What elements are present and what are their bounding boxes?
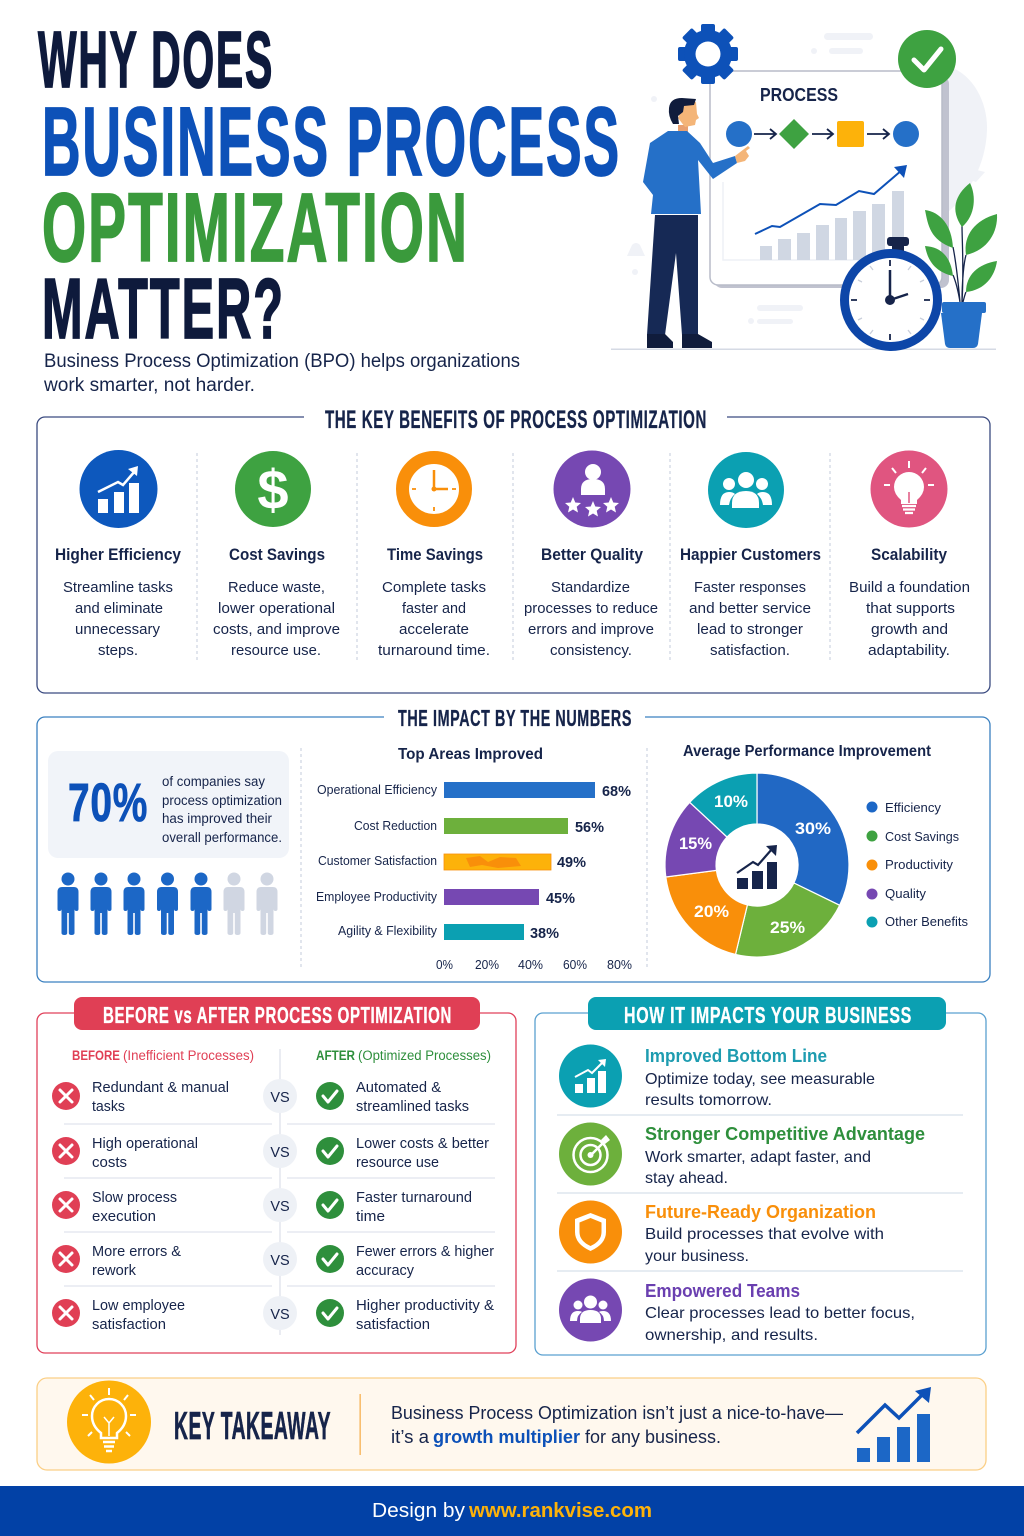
benefit: time savings: [378, 458, 490, 659]
row 3: [52, 1188, 472, 1225]
row 1: Redundant & manual: [92, 1080, 229, 1096]
benefit: time savings: faster and: [402, 600, 466, 617]
bar chart: top areas improved: 20%: [475, 958, 499, 972]
item: stronger competitive advantage: Stronger Competitive Advantage: [645, 1123, 925, 1144]
row 5: Higher productivity &: [356, 1298, 494, 1314]
bar chart: top areas improved: 45%: [546, 890, 575, 907]
bar chart: top areas improved: [316, 746, 632, 972]
benefit: scalability: adaptability.: [868, 642, 950, 659]
row 4: VS: [270, 1253, 290, 1269]
footer: Design by: [372, 1500, 465, 1522]
row 4: [52, 1242, 494, 1279]
legend: Productivity: [885, 857, 953, 872]
subtitle: Business Process Optimization (BPO) helps organizations: [44, 351, 520, 372]
benefit: better quality: Standardize: [551, 579, 630, 596]
item: stronger competitive advantage: stay ahead.: [645, 1170, 728, 1187]
ground line: [611, 348, 996, 350]
banner: before vs after: BEFORE vs AFTER PROCESS OPTIMIZATION: [103, 1002, 452, 1028]
panel: before vs after: [37, 997, 516, 1353]
row 5: [52, 1296, 494, 1333]
title: [38, 15, 621, 357]
donut chart: average performance improvement: 10%: [714, 792, 748, 811]
benefit: cost savings: Cost Savings: [229, 546, 325, 564]
row 1: [52, 1079, 469, 1115]
item: improved bottom line: [559, 1044, 875, 1109]
panel: how it impacts your business: [535, 997, 986, 1355]
legend: [866, 800, 968, 929]
banner: how it impacts: [588, 997, 946, 1030]
legend: Quality: [885, 886, 926, 901]
benefit: scalability: Scalability: [871, 546, 948, 564]
takeaway text: for any business.: [585, 1427, 721, 1447]
benefit: higher efficiency: steps.: [98, 642, 138, 659]
row 5: satisfaction: [356, 1317, 430, 1333]
row 1: tasks: [92, 1099, 125, 1115]
flow diagram: [726, 119, 919, 149]
heading: key benefits: THE KEY BENEFITS OF PROCESS OPTIMIZATION: [325, 406, 707, 434]
panel: impact by the numbers: [37, 705, 990, 982]
takeaway text: it’s a: [391, 1427, 430, 1447]
bar chart: top areas improved: 0%: [436, 958, 453, 972]
benefit: higher efficiency: and eliminate: [75, 600, 163, 617]
item: empowered teams: [559, 1278, 915, 1344]
row 4: More errors &: [92, 1244, 181, 1260]
bar chart: top areas improved: Operational Efficiency: [317, 782, 437, 797]
row 5: VS: [270, 1307, 290, 1323]
row 3: Faster turnaround: [356, 1190, 472, 1206]
benefit: better quality: consistency.: [550, 642, 632, 659]
stat card: 70%: has improved their: [162, 811, 272, 826]
item: improved bottom line: Improved Bottom Line: [645, 1045, 827, 1066]
benefit: happier customers: Happier Customers: [680, 546, 821, 564]
benefit: higher efficiency: [55, 450, 182, 659]
benefit: time savings: turnaround time.: [378, 642, 490, 659]
bar chart: top areas improved: Employee Productivity: [316, 889, 437, 904]
item: future-ready organization: [559, 1200, 884, 1265]
row 1: VS: [270, 1090, 290, 1106]
process board: PROCESS: [760, 85, 838, 105]
heading: impact: THE IMPACT BY THE NUMBERS: [398, 705, 632, 731]
title: MATTER?: [42, 262, 285, 357]
bar chart: top areas improved: 68%: [602, 783, 631, 800]
benefit: scalability: [849, 450, 970, 659]
row 1: streamlined tasks: [356, 1099, 469, 1115]
benefit: happier customers: satisfaction.: [710, 642, 790, 659]
title: OPTIMIZATION: [42, 173, 469, 282]
benefit: better quality: [524, 450, 658, 659]
row 5: Low employee: [92, 1298, 185, 1314]
benefit: cost savings: Reduce waste,: [228, 579, 325, 596]
benefit: scalability: that supports: [866, 600, 955, 617]
benefit: better quality: processes to reduce: [524, 600, 658, 617]
benefit: cost savings: $: [257, 458, 289, 521]
bar chart: top areas improved: Customer Satisfaction: [318, 853, 437, 868]
stat card: 70%: process optimization: [162, 793, 282, 808]
benefit: happier customers: Faster responses: [694, 579, 806, 596]
stopwatch: [844, 237, 938, 346]
item: empowered teams: ownership, and results.: [645, 1327, 818, 1344]
item: stronger competitive advantage: [559, 1122, 925, 1187]
row 5: satisfaction: [92, 1317, 166, 1333]
row 4: rework: [92, 1263, 137, 1279]
benefit: happier customers: lead to stronger: [697, 621, 803, 638]
stat card: 70%: [48, 751, 289, 858]
takeaway text: [391, 1403, 843, 1447]
donut chart: average performance improvement: 20%: [694, 902, 729, 921]
bar chart: top areas improved: Top Areas Improved: [398, 746, 543, 763]
row 4: Fewer errors & higher: [356, 1244, 494, 1260]
potted plant: [925, 183, 997, 348]
growth chart: [723, 165, 907, 260]
bar chart: top areas improved: 49%: [557, 854, 586, 871]
benefit: higher efficiency: Higher Efficiency: [55, 546, 182, 564]
benefit: time savings: Time Savings: [387, 546, 483, 564]
column heading: before: (Inefficient Processes): [123, 1048, 254, 1063]
benefit: better quality: errors and improve: [528, 621, 654, 638]
icon: gear: [678, 24, 738, 84]
stat card: 70%: overall performance.: [162, 830, 282, 845]
benefit: cost savings: lower operational: [218, 600, 335, 617]
stat card: 70%: of companies say: [162, 774, 265, 789]
footer: www.rankvise.com: [468, 1500, 652, 1522]
row 3: Slow process: [92, 1190, 177, 1206]
process board: [710, 71, 949, 288]
benefit: time savings: accelerate: [399, 621, 469, 638]
column heading: after: (Optimized Processes): [358, 1048, 491, 1063]
bar chart: top areas improved: 40%: [518, 958, 543, 972]
row 4: accuracy: [356, 1263, 415, 1279]
row 2: VS: [270, 1145, 290, 1161]
legend: Other Benefits: [885, 914, 968, 929]
row 2: High operational: [92, 1136, 198, 1152]
benefit: cost savings: [213, 451, 340, 659]
row 1: Automated &: [356, 1080, 441, 1096]
bar chart: top areas improved: Cost Reduction: [354, 818, 437, 833]
item: improved bottom line: Optimize today, see measurable: [645, 1071, 875, 1088]
benefit: scalability: growth and: [871, 621, 948, 638]
footer: [0, 1486, 1024, 1536]
bar chart: top areas improved: 60%: [563, 958, 587, 972]
takeaway text: Business Process Optimization isn’t just a nice-to-have—: [391, 1403, 843, 1423]
benefit: cost savings: costs, and improve: [213, 621, 340, 638]
background blobs: [627, 33, 987, 324]
donut chart: average performance improvement: 25%: [770, 918, 805, 937]
benefit: time savings: Complete tasks: [382, 579, 486, 596]
legend: Efficiency: [885, 800, 941, 815]
benefit: better quality: Better Quality: [541, 546, 644, 564]
benefit: scalability: Build a foundation: [849, 579, 970, 596]
subtitle: work smarter, not harder.: [43, 375, 255, 396]
row 3: VS: [270, 1199, 290, 1215]
row 3: time: [356, 1209, 385, 1225]
hero illustration: person presenting process board: [611, 24, 997, 350]
row 2: [52, 1134, 489, 1171]
benefit: cost savings: resource use.: [231, 642, 321, 659]
banner: before vs after: [74, 997, 480, 1030]
donut chart: average performance improvement: Average Performance Improvement: [683, 743, 931, 760]
item: future-ready organization: your business.: [645, 1248, 749, 1265]
pictogram: 5 of 7 people: [58, 872, 278, 935]
donut chart: average performance improvement: 15%: [679, 834, 712, 853]
donut chart: average performance improvement: [665, 743, 968, 957]
callout: key takeaway: [37, 1378, 986, 1470]
benefit: higher efficiency: Streamline tasks: [63, 579, 173, 596]
benefit: higher efficiency: unnecessary: [75, 621, 160, 638]
row 3: execution: [92, 1209, 156, 1225]
column heading: before: BEFORE: [72, 1048, 120, 1063]
row 2: Lower costs & better: [356, 1136, 489, 1152]
icon: lightbulb: [67, 1380, 151, 1464]
row 2: resource use: [356, 1155, 439, 1171]
callout: key takeaway: KEY TAKEAWAY: [174, 1405, 331, 1448]
icon: growth chart: [857, 1387, 931, 1462]
bar chart: top areas improved: 80%: [607, 958, 632, 972]
bar chart: top areas improved: 38%: [530, 925, 559, 942]
takeaway text: growth multiplier: [433, 1427, 580, 1447]
icon: check badge: [898, 30, 956, 88]
column heading: after: AFTER: [316, 1048, 355, 1063]
person: [643, 98, 750, 348]
item: empowered teams: Clear processes lead to better focus,: [645, 1305, 915, 1322]
panel: key benefits: [37, 406, 990, 693]
donut chart: average performance improvement: 30%: [795, 819, 831, 838]
item: future-ready organization: Future-Ready Organization: [645, 1201, 876, 1222]
title: WHY DOES: [38, 15, 274, 104]
row 2: costs: [92, 1155, 127, 1171]
legend: Cost Savings: [885, 829, 959, 844]
benefit: happier customers: [680, 452, 821, 659]
subtitle: [43, 351, 520, 396]
stat card: 70%: 70%: [68, 773, 148, 833]
item: improved bottom line: results tomorrow.: [645, 1092, 772, 1109]
bar chart: top areas improved: Agility & Flexibility: [338, 923, 437, 938]
item: future-ready organization: Build processes that evolve with: [645, 1226, 884, 1243]
item: empowered teams: Empowered Teams: [645, 1280, 800, 1301]
item: stronger competitive advantage: Work smarter, adapt faster, and: [645, 1149, 871, 1166]
benefit: happier customers: and better service: [689, 600, 811, 617]
bar chart: top areas improved: 56%: [575, 819, 604, 836]
